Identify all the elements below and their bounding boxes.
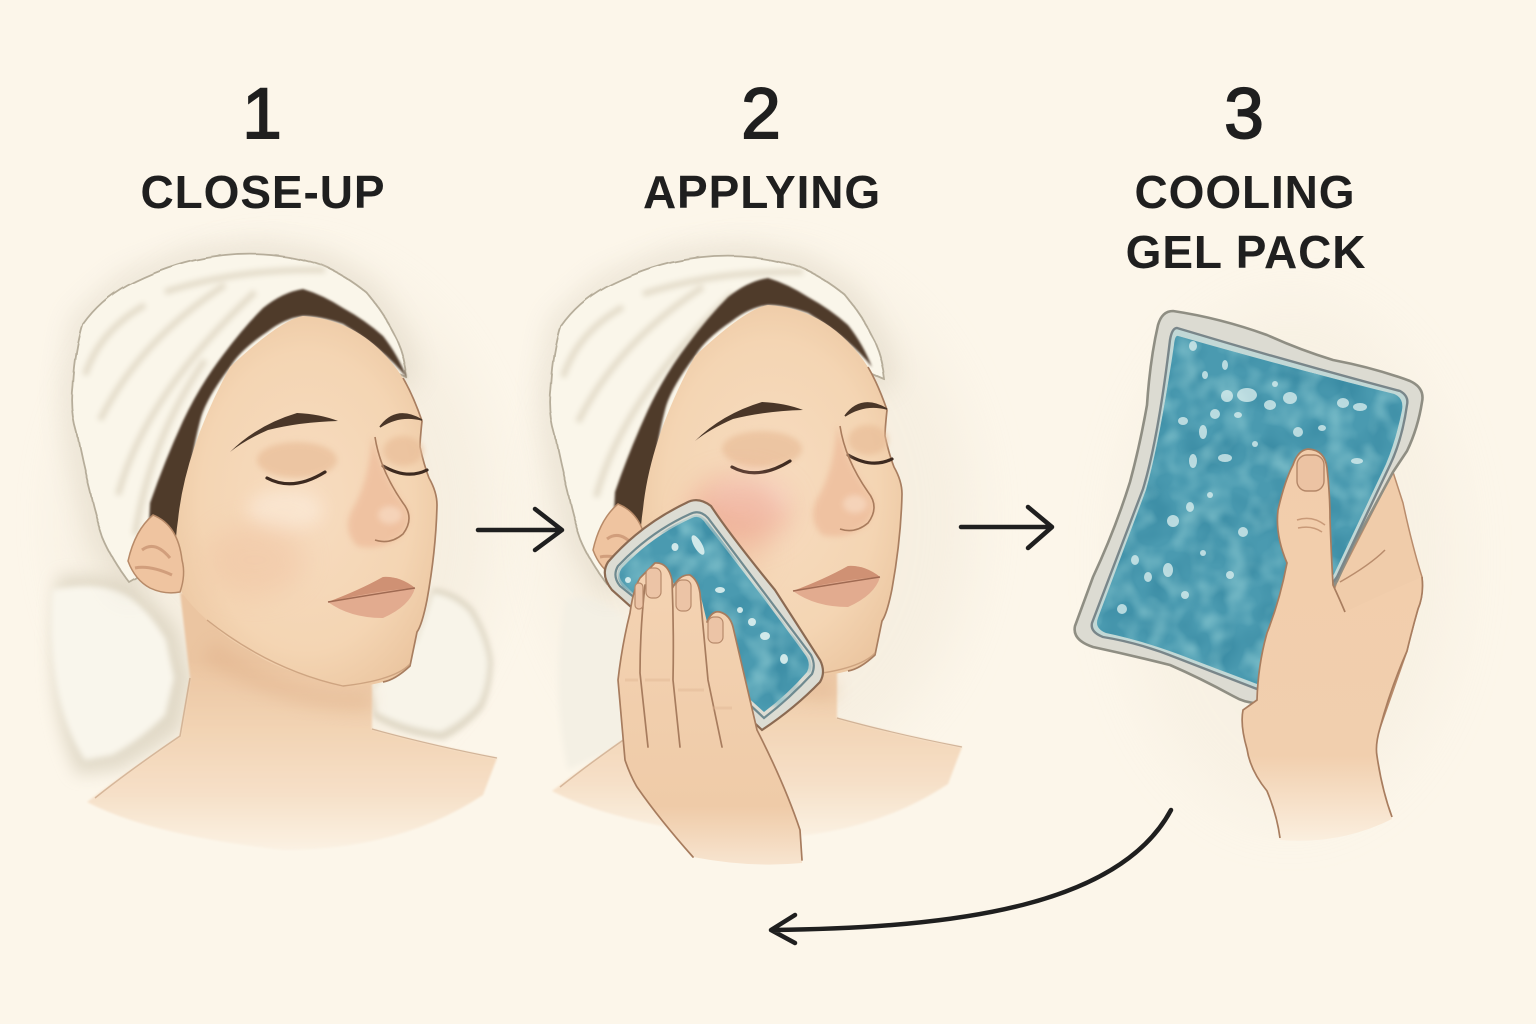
step 1 number: 1 bbox=[242, 75, 282, 154]
hand and thumb bbox=[1242, 449, 1422, 841]
step 3 heading bbox=[1126, 75, 1366, 278]
arrow: curved return to step 2 bbox=[771, 810, 1171, 943]
step 3 label: line 2: GEL PACK bbox=[1126, 226, 1366, 278]
face bbox=[552, 278, 962, 839]
illustration: hand holding gel pack bbox=[1073, 310, 1424, 840]
fingernails bbox=[635, 568, 723, 643]
step 2 number: 2 bbox=[741, 75, 781, 154]
pillow bbox=[51, 575, 493, 775]
pillow bbox=[558, 598, 625, 770]
fingers behind pack bbox=[1300, 472, 1422, 728]
cheek redness bbox=[690, 476, 790, 544]
step 2 label: APPLYING bbox=[643, 166, 881, 218]
step 1 heading bbox=[141, 75, 385, 218]
gel speckles bbox=[1117, 341, 1367, 614]
step 3 label: line 1: COOLING bbox=[1135, 166, 1355, 218]
step 2 heading bbox=[643, 75, 881, 218]
arrow: step 2 to 3 bbox=[961, 507, 1052, 548]
arrow: step 1 to 2 bbox=[478, 509, 562, 550]
illustration: woman with towel on pillow bbox=[51, 254, 497, 850]
small gel pack bbox=[600, 500, 830, 730]
step 1 label: CLOSE-UP bbox=[141, 166, 385, 218]
towel bbox=[72, 254, 407, 583]
thumbnail bbox=[1297, 455, 1324, 491]
towel bbox=[550, 256, 885, 585]
face bbox=[87, 289, 497, 850]
hand holding pack bbox=[618, 563, 802, 865]
illustration: applying gel pack bbox=[545, 256, 975, 865]
gel pack bbox=[1075, 311, 1422, 703]
step 3 number: 3 bbox=[1224, 75, 1264, 154]
